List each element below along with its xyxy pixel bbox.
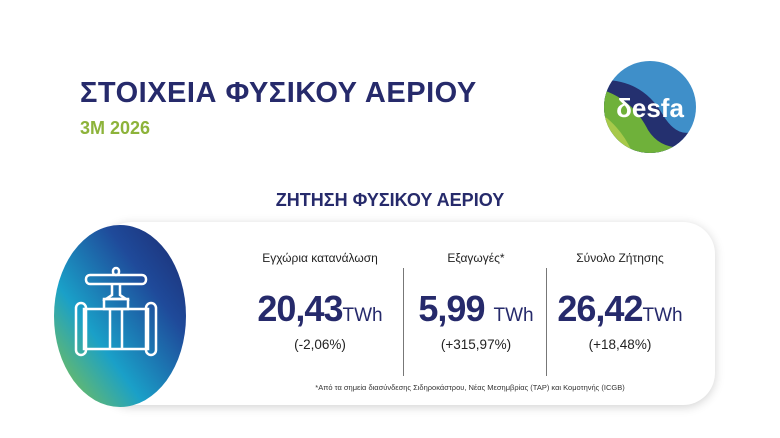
logo xyxy=(604,61,696,153)
column 2 xyxy=(418,251,534,352)
text: (-2,06%) xyxy=(294,337,346,352)
subtitle: 3M 2026 xyxy=(80,118,150,138)
text: Σύνολο Ζήτησης xyxy=(576,251,664,265)
card xyxy=(100,222,715,405)
title: ΣΤΟΙΧΕΙΑ ΦΥΣΙΚΟΥ ΑΕΡΙΟΥ xyxy=(80,77,477,109)
text: 5,99 TWh xyxy=(418,288,534,329)
logo: δesfa xyxy=(616,93,684,123)
text: (+315,97%) xyxy=(441,337,511,352)
text: Εξαγωγές* xyxy=(447,251,505,265)
text: (+18,48%) xyxy=(589,337,651,352)
column 3 xyxy=(557,251,683,352)
footnote: *Από τα σημεία διασύνδεσης Σιδηροκάστρου, Νέας Μεσημβρίας (TAP) και Κομοτηνής (ICGB) xyxy=(315,383,625,392)
text: 26,42TWh xyxy=(557,288,683,329)
column 1 xyxy=(257,251,383,352)
icon: valve circle xyxy=(54,225,186,407)
heading: ΖΗΤΗΣΗ ΦΥΣΙΚΟΥ ΑΕΡΙΟΥ xyxy=(276,190,504,210)
text: 20,43TWh xyxy=(257,288,383,329)
text: Εγχώρια κατανάλωση xyxy=(262,251,378,265)
